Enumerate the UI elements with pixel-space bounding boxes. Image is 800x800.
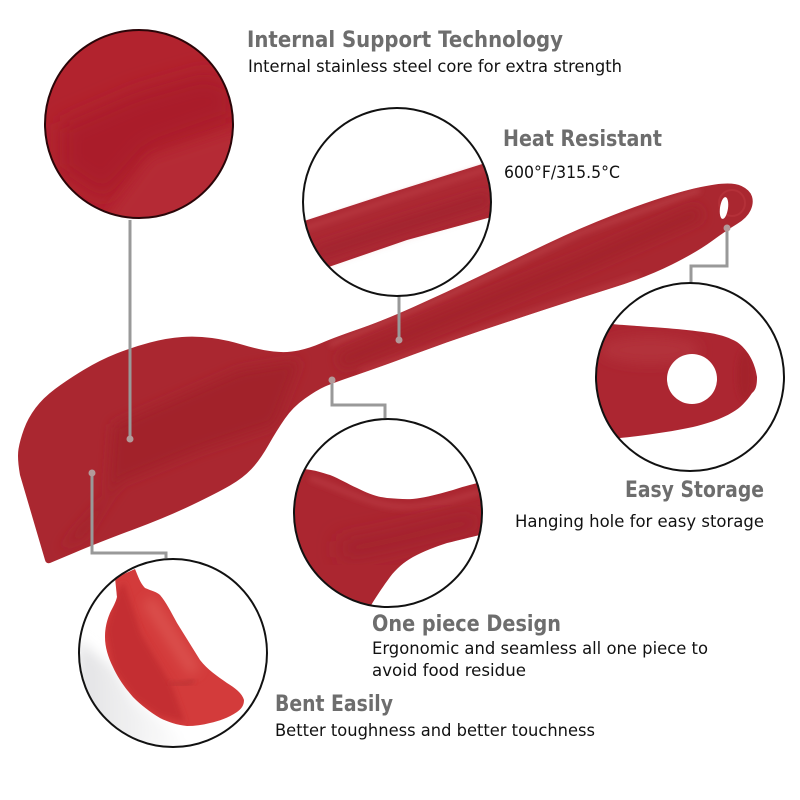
text: easy storage: Hanging hole for easy storage: [515, 512, 764, 532]
text: one piece design: avoid food residue: [372, 661, 526, 681]
spatula main product: [18, 184, 753, 563]
text: one piece design: Ergonomic and seamless all one piece to: [372, 639, 708, 659]
connector lines: [88, 220, 730, 558]
circle: bent easily detail: [78, 559, 267, 750]
text: heat resistant: 600°F/315.5°C: [504, 163, 620, 183]
text: easy storage: Easy Storage: [625, 478, 764, 503]
text: heat resistant: [503, 127, 662, 183]
circle: heat resistant detail: [295, 108, 495, 296]
text: bent easily: [275, 692, 595, 741]
text: internal support technology: Internal stainless steel core for extra strength: [248, 57, 622, 77]
text: easy storage: [515, 478, 764, 532]
text: internal support technology: [247, 28, 622, 77]
hanging hole: [719, 190, 745, 219]
text: one piece design: [372, 612, 708, 681]
circle: hanging hole detail: [590, 283, 784, 471]
text: one piece design: One piece Design: [372, 612, 561, 637]
circle: internal support detail: [45, 30, 240, 230]
text: bent easily: Better toughness and better touchness: [275, 721, 595, 741]
text: bent easily: Bent Easily: [275, 692, 393, 717]
text: internal support technology: Internal Support Technology: [247, 28, 563, 53]
text: heat resistant: Heat Resistant: [503, 127, 662, 152]
circle: one piece design detail: [293, 418, 483, 608]
